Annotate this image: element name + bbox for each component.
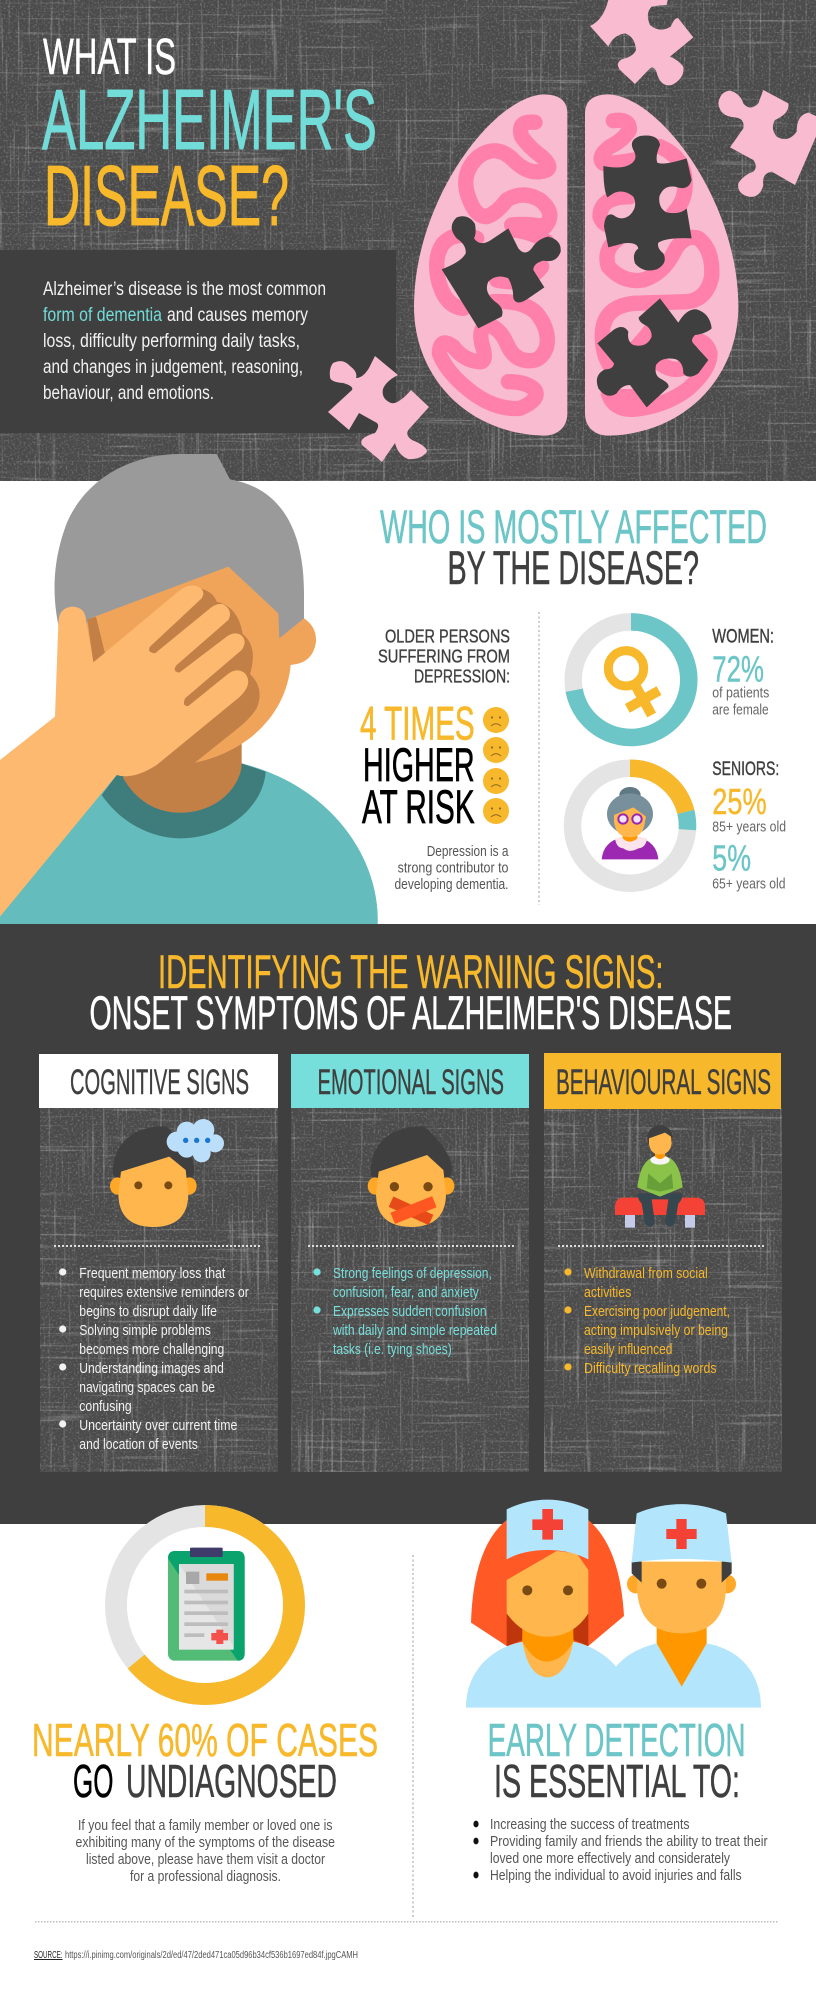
hand and arm [0,585,248,917]
title [42,28,377,244]
text: older persons suffering from depression: SUFFERING FROM [378,646,510,667]
list: cognitive signs: navigating spaces can be [79,1380,215,1396]
male doctor hat [632,1504,732,1563]
list: behavioural signs: Exercising poor judgement, [584,1304,730,1320]
pink puzzle piece right [718,90,816,197]
heading: early detection is essential to [488,1714,746,1807]
header: emotional signs: EMOTIONAL SIGNS [318,1063,504,1102]
icon: person sitting on bench [615,1125,705,1228]
list: behavioural signs: Difficulty recalling words [584,1361,717,1377]
male doctor face [637,1562,726,1633]
male doctor neck [657,1623,707,1687]
heading: nearly 60% of cases go undiagnosed: NEARLY 60% OF CASES [32,1714,378,1766]
text: older persons suffering from depression: DEPRESSION: [414,666,510,687]
text: women stats: are female [712,703,769,719]
text: see a doctor advice: exhibiting many of the symptoms of the disease [76,1835,335,1851]
panel: emotional signs [291,1054,529,1472]
female doctor hair [471,1520,624,1646]
list: emotional signs: Expresses sudden confusion [333,1304,487,1320]
male doctor ears [627,1575,644,1593]
chart: women donut 72% [573,622,689,738]
list: behavioural signs: acting impulsively or being [584,1323,728,1339]
chart: seniors donut 25% and 5% [572,768,688,883]
text: older persons suffering from depression: OLDER PERSONS [385,626,510,647]
text: see a doctor advice [76,1818,335,1885]
panel: intro text box: and changes in judgement, reasoning, [43,357,303,378]
heading: nearly 60% of cases go undiagnosed: UNDIAGNOSED [126,1755,337,1807]
list: behavioural signs: Withdrawal from social [584,1266,708,1282]
list: early detection benefits: Helping the individual to avoid injuries and falls [490,1868,742,1884]
panel: warning signs dark background [0,924,816,1524]
text: depression note: developing dementia. [394,877,508,893]
list: emotional signs: with daily and simple repeated [332,1323,497,1339]
face and ear [83,567,316,763]
title: DISEASE? [44,149,289,244]
text: women stats [712,627,774,719]
text: depression note: strong contributor to [398,861,508,877]
list: emotional signs [313,1266,497,1358]
panel: intro text box: loss, difficulty performing daily tasks, [43,331,300,352]
text: seniors stats: 85+ years old [712,820,786,836]
text: seniors stats: 25% [712,781,767,822]
neck [117,733,242,813]
chart: undiagnosed donut with clipboard [116,1516,294,1694]
list: early detection benefits [473,1817,768,1884]
title: ALZHEIMER'S [42,73,377,168]
list: emotional signs: confusion, fear, and anxiety [333,1285,479,1301]
text: 4 times higher at risk [360,696,475,833]
list: early detection benefits: loved one more effectively and considerately [490,1851,731,1867]
header: cognitive signs [39,1054,278,1108]
panel: intro text box: Alzheimer’s disease is the most common [43,279,326,300]
female doctor neck [522,1637,573,1677]
text: seniors stats: 5% [712,838,751,879]
panel: intro text box [0,250,396,433]
text: seniors stats: 65+ years old [712,877,786,893]
pink puzzle piece top [590,0,693,85]
brain folds [437,120,712,409]
illustration: man covering his face [0,454,378,924]
panel: cognitive signs [39,1054,278,1472]
female doctor hat [507,1500,588,1559]
text: seniors stats: SENIORS: [712,759,779,780]
list: cognitive signs [59,1266,249,1453]
hand shadow [87,588,260,767]
icon: thinking head [110,1119,224,1227]
header: cognitive signs: COGNITIVE SIGNS [70,1063,249,1102]
text: women stats: of patients [712,686,769,702]
text: women stats: WOMEN: [712,627,774,648]
dark puzzle piece top right [603,136,692,270]
dark puzzle piece left [442,216,561,328]
title: WHAT IS [43,28,176,85]
collar [102,763,266,838]
list: behavioural signs [564,1266,730,1377]
panel: intro text box: form of dementia [43,305,162,326]
text: source: https://i.pinimg.com/originals/2d/ed/47/2ded471ca05d96b34cf536b1697ed84f.jpgCAMH [65,1950,358,1961]
icon: female symbol [608,651,659,715]
list: behavioural signs: easily influenced [584,1342,672,1358]
heading: who is mostly affected [380,501,767,595]
list: emotional signs: tasks (i.e. tying shoes) [333,1342,452,1358]
hair [55,454,304,650]
list: behavioural signs: activities [584,1285,631,1301]
text: 4 times higher at risk: 4 TIMES [360,696,475,750]
brain right hemisphere [585,94,738,436]
text: see a doctor advice: If you feel that a family member or loved one is [78,1818,332,1834]
text: older persons suffering from depression [378,626,510,687]
icon: grandmother [602,787,658,859]
icons: sad faces [483,707,509,824]
header: emotional signs [291,1054,529,1108]
dark puzzle piece bottom right [597,298,712,407]
icon: loose puzzle piece lower left [328,356,429,462]
shoulders [466,1642,761,1708]
text: depression note: Depression is a [427,844,509,860]
list: cognitive signs: confusing [79,1399,132,1415]
panel: intro text box: behaviour, and emotions. [43,383,214,404]
list: early detection benefits: Increasing the success of treatments [490,1817,690,1833]
heading: nearly 60% of cases go undiagnosed: GO [73,1755,113,1807]
list: cognitive signs: Understanding images and [79,1361,224,1377]
heading: identifying the warning signs [90,945,732,1039]
list: early detection benefits: Providing family and friends the ability to treat their [490,1834,768,1850]
icon: clipboard [168,1548,245,1661]
list: cognitive signs: Solving simple problems [79,1323,211,1339]
panel: behavioural signs [544,1053,782,1472]
panel: hero chalkboard background [0,0,816,481]
text: women stats: 72% [712,649,764,690]
text: 4 times higher at risk: AT RISK [362,780,475,833]
female doctor face [507,1551,588,1637]
text: see a doctor advice: listed above, please have them visit a doctor [86,1852,325,1868]
list: cognitive signs: begins to disrupt daily life [79,1304,217,1320]
illustration: two doctors [466,1500,761,1708]
text: source: SOURCE: [34,1950,62,1961]
panel: bottom white background [0,1524,816,1990]
brain left hemisphere [414,94,567,436]
header: behavioural signs [544,1053,781,1109]
list: cognitive signs: Uncertainty over current time [79,1418,237,1434]
shirt [0,763,378,924]
list: cognitive signs: and location of events [79,1437,198,1453]
panel: who is affected white background [0,481,816,924]
list: cognitive signs: becomes more challenging [79,1342,224,1358]
text: see a doctor advice: for a professional diagnosis. [130,1869,281,1885]
text: depression note [394,844,509,893]
icon: brain with puzzle pieces [414,0,816,436]
text: seniors stats [712,759,786,893]
list: emotional signs: Strong feelings of depression, [333,1266,492,1282]
panel: intro text box: and causes memory [167,305,308,326]
icon: head with taped mouth [368,1127,454,1227]
text: 4 times higher at risk: HIGHER [363,738,475,791]
list: cognitive signs: requires extensive reminders or [79,1285,249,1301]
list: cognitive signs: Frequent memory loss that [79,1266,225,1282]
heading: nearly 60% of cases go undiagnosed [32,1714,378,1807]
